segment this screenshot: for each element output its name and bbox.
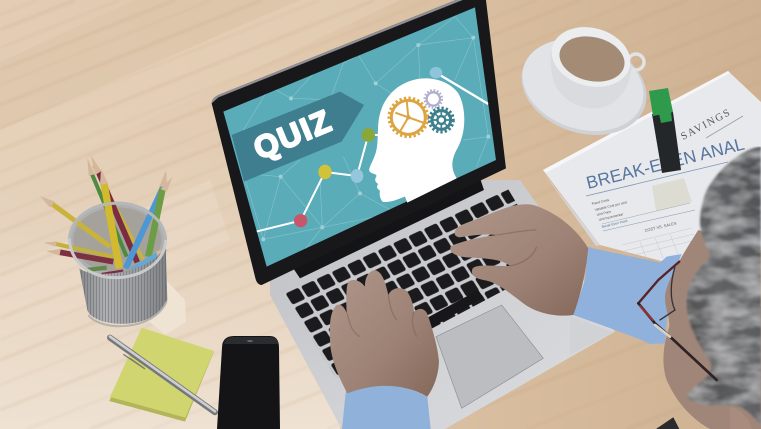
lavender gear [425,90,442,108]
white head silhouette [369,78,464,203]
man head with glasses, seen from behind [570,147,761,429]
pencils [50,166,163,275]
dark collar [656,417,679,429]
chart grid [622,228,696,262]
coffee surface [555,30,629,88]
text: table labels: Unit Incremental [598,212,623,222]
silver pen [110,337,215,412]
shirt cuff near man [575,247,682,344]
eyeglasses [638,262,717,380]
text: table labels: Unit Price [596,210,612,217]
financial paper document [543,71,761,262]
sharpened pencil tips [40,155,173,258]
teal gear [429,108,453,132]
teal screen [223,7,496,267]
text: table labels: Variable Cost per Unit [594,200,627,212]
left cuff [342,384,431,429]
text: table labels: Break-Even Point [601,219,628,229]
laptop base [270,180,615,429]
quiz arrow banner [232,92,364,182]
hinge [293,180,484,278]
laptop lid and screen [212,0,506,285]
chart dots [294,214,307,227]
typing hands and shirt cuffs [330,204,630,429]
text: table labels [591,198,628,229]
right cuff [573,247,630,335]
text: savings heading: SAVINGS [679,107,733,143]
ear [730,407,752,429]
right hand [450,204,588,316]
left hand [330,270,439,397]
gold gear [389,98,428,137]
keyboard [283,189,537,379]
hair [686,147,761,427]
face and skin [663,230,761,429]
yellow sticky notes [109,328,215,422]
white chart line [253,135,383,232]
text: chart title: COST VS. SALES [644,220,677,233]
text: table labels: Fixed Costs [591,198,610,206]
green highlighter marker [649,88,681,173]
smartphone [217,336,280,429]
trackpad [436,305,543,408]
mesh cup body [79,245,167,324]
mesh cup back [68,202,166,276]
quiz label: QUIZ [249,103,337,166]
text: break-even analysis heading: BREAK-EVEN ANAL [584,134,747,193]
network lines [243,17,488,260]
pencil holder with pencils [40,155,173,326]
coffee cup on saucer [509,19,659,151]
